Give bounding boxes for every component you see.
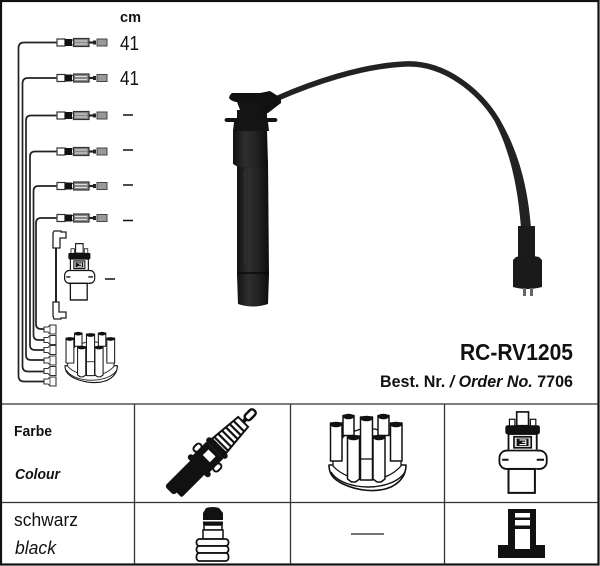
spark plug boot [224,91,281,306]
icon: ignition coil [499,412,547,493]
small distributor cap [65,332,117,383]
lead lengths: 41 [120,68,139,90]
coil boot [513,226,542,296]
distributor terminals [44,325,56,386]
part number: RC-RV1205 [460,339,573,365]
cm column heading: cm [120,10,141,26]
small ignition coil [65,244,95,300]
icon: coil boot [498,509,545,558]
wiring diagram: ignition leads [18,42,56,382]
ignition cable [278,64,531,228]
icon: distributor cap [329,414,406,491]
coil lead [53,231,66,319]
lead connectors [55,38,107,222]
icon: plug boot [196,507,228,561]
table row label: Colour: Colour [15,467,61,483]
colour: black: black [15,538,57,558]
dash: no cap part [351,533,384,535]
lead lengths: 41 [120,33,139,55]
table grid [2,404,598,564]
order number: Best. Nr. / Order No. 7706 [380,372,573,391]
lead lengths [105,33,139,279]
colour: schwarz: schwarz [14,510,78,530]
table row label: Farbe: Farbe [14,424,52,440]
icon: spark plug [160,399,266,505]
